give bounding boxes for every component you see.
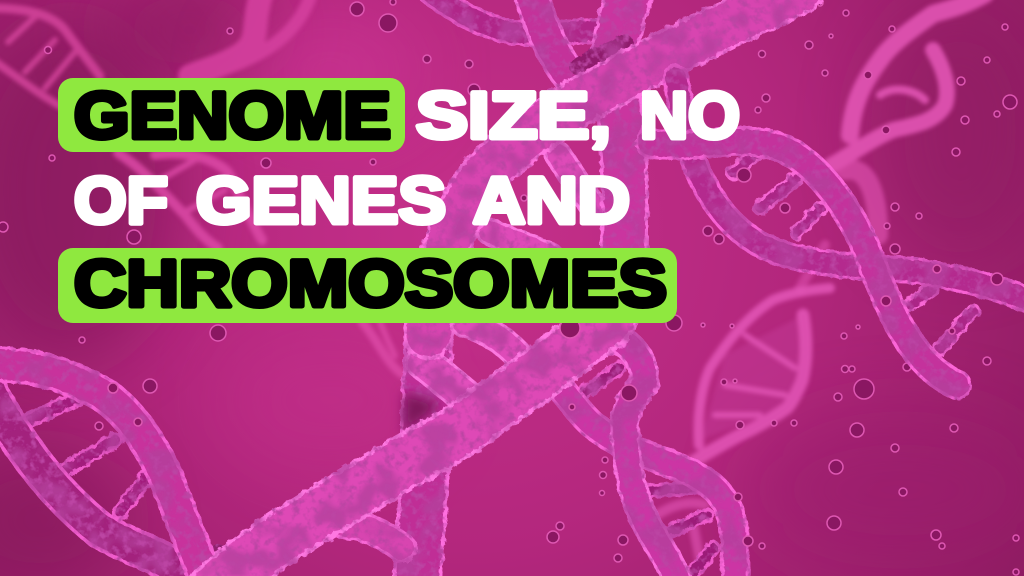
DNA helix: bottom left bbox=[0, 364, 240, 576]
dark shadow patch on vertical strand bbox=[404, 392, 442, 434]
heading line: of genes and: AND bbox=[473, 163, 630, 237]
DNA helix: main diagonal strand bbox=[215, 318, 610, 576]
particles on top of strands bbox=[108, 168, 1003, 546]
DNA helix: strand joints bbox=[345, 155, 592, 548]
title bbox=[58, 78, 740, 323]
heading line: of genes and: OF bbox=[74, 163, 168, 237]
heading line: of genes and bbox=[74, 163, 630, 237]
lower-right strand bbox=[657, 288, 830, 560]
heading words: size, no bbox=[416, 78, 740, 152]
DNA helix: top strands bbox=[428, 0, 800, 335]
heading line: of genes and: GENES bbox=[196, 163, 446, 237]
heading words: size, no: SIZE, bbox=[416, 78, 611, 152]
highlight pill: genome bbox=[58, 78, 405, 152]
top-right strand bbox=[800, 0, 985, 288]
top-left strand bbox=[0, 8, 100, 106]
top-centre strand bbox=[190, 0, 312, 76]
highlight pill: chromosomes bbox=[58, 248, 677, 323]
heading words: size, no: NO bbox=[640, 78, 740, 152]
heading word: chromosomes: CHROMOSOMES bbox=[74, 246, 667, 320]
middle-left strand bbox=[118, 153, 402, 374]
DNA helix: centre lower strands bbox=[416, 318, 735, 576]
DNA helix: right bbox=[650, 78, 1024, 385]
heading word: genome: GENOME bbox=[74, 78, 391, 152]
